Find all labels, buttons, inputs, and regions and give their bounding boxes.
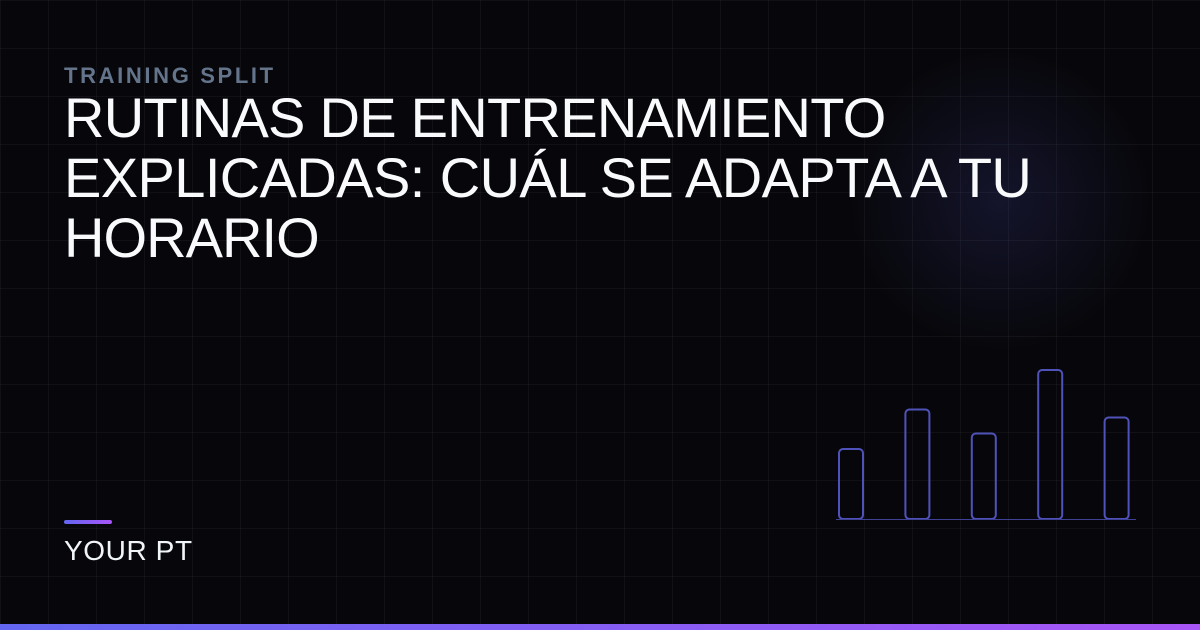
brand name: YOUR PT [64,535,193,566]
bar chart [836,369,1136,520]
title: RUTINAS DE ENTRENAMIENTO [64,86,886,149]
title: HORARIO [64,206,319,269]
accent bar [64,520,112,524]
title: EXPLICADAS: CUÁL SE ADAPTA A TU [64,146,1031,209]
eyebrow label: TRAINING SPLIT [64,63,276,88]
bottom gradient strip [0,624,1200,630]
title [64,86,1031,269]
